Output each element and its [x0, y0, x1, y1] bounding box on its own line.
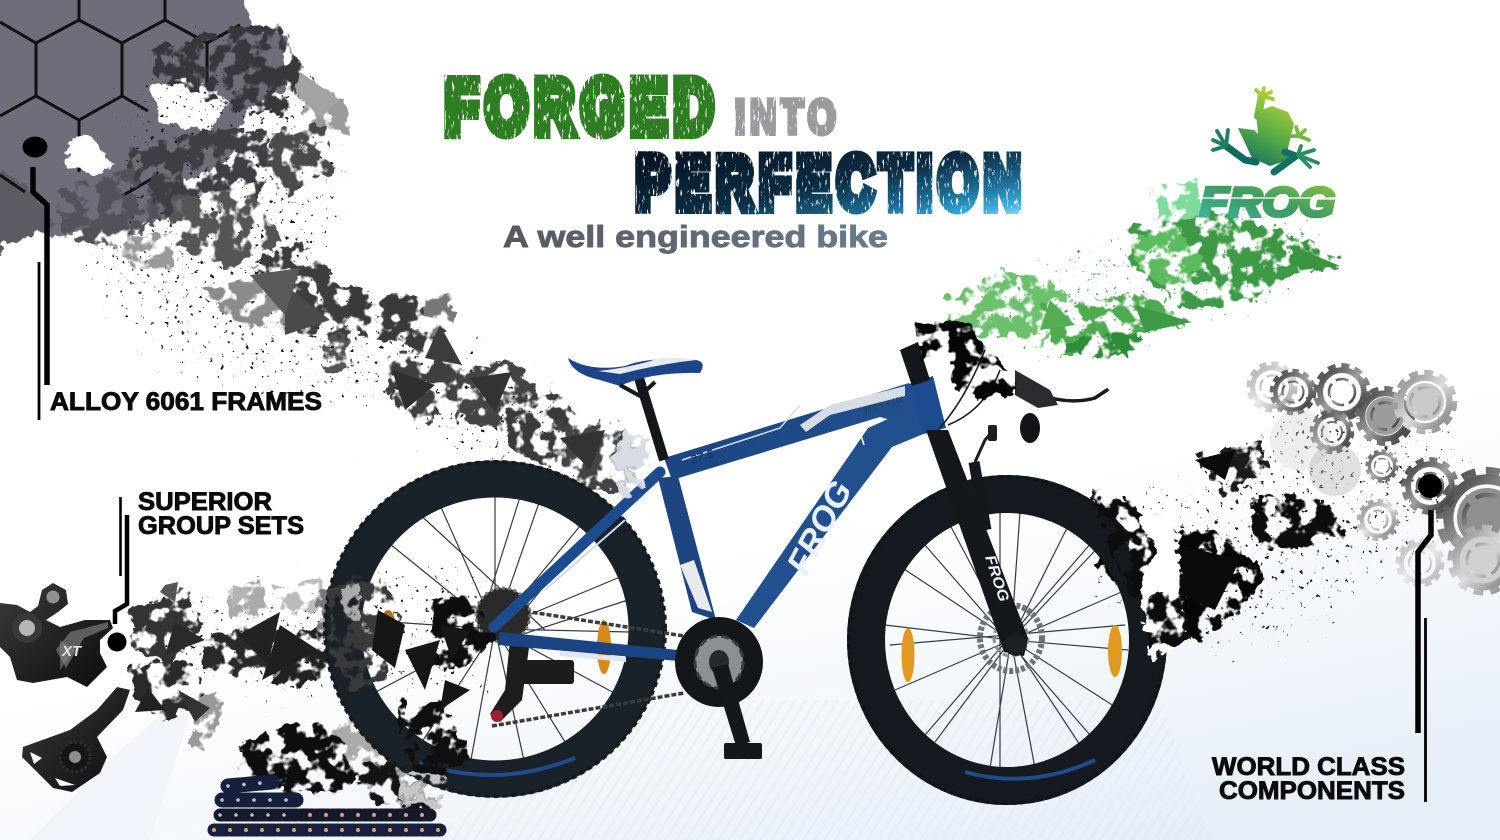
fork text: FROG — [981, 553, 1012, 604]
tagline: A well engineered bike — [503, 219, 888, 254]
derailleur badge: XT — [61, 643, 83, 660]
rear cassette and derailleur — [476, 588, 574, 722]
reflector — [597, 620, 611, 674]
front wheel — [849, 477, 1165, 803]
crisp green shards — [1040, 245, 1340, 332]
callout: world class components — [1212, 474, 1442, 805]
title: into: INTO — [735, 90, 841, 143]
title: perfection: PERFECTION — [636, 143, 1027, 224]
reflector — [1108, 625, 1122, 677]
fork and head — [926, 350, 1028, 656]
shatter over front wheel — [1090, 490, 1190, 660]
green shard trail — [945, 180, 1342, 358]
brake disc — [980, 605, 1042, 671]
callout: alloy frames — [22, 136, 322, 420]
crisp shards at hub — [372, 610, 470, 710]
label: SUPERIOR — [138, 488, 272, 516]
label: GROUP SETS — [138, 512, 304, 540]
title — [445, 64, 1027, 254]
handlebar and stem — [900, 320, 1107, 443]
logo wordmark: FROG — [1200, 179, 1335, 225]
reflector — [379, 610, 397, 662]
frame text: model: VIPER X-101 — [862, 394, 905, 416]
chain links — [214, 782, 440, 830]
derailleur body — [0, 583, 113, 687]
frame text: FROG: FROG — [780, 475, 860, 581]
frame text: size: 27.5 — [688, 447, 716, 467]
rear wheel — [325, 462, 665, 796]
shard trail: alloy frames — [60, 25, 645, 495]
seat post and saddle — [568, 358, 703, 460]
title: forged: FORGED — [445, 64, 720, 149]
callout: group sets — [108, 488, 304, 652]
chain — [492, 608, 684, 726]
right shard trail — [1090, 440, 1345, 640]
bicycle — [325, 320, 1165, 803]
label: WORLD CLASS — [1212, 753, 1405, 781]
shard trail: chain — [240, 700, 440, 815]
rear derailleur — [0, 583, 130, 792]
white breakup on plate — [0, 76, 226, 290]
chainring and crank — [675, 617, 763, 759]
reflector — [902, 628, 914, 682]
derailleur cage — [22, 687, 130, 792]
gears — [1249, 364, 1500, 592]
shatter over rear wheel — [328, 430, 650, 810]
hexagon grid lines — [0, 0, 240, 196]
frog logo — [1197, 88, 1336, 225]
crisp shards: group sets — [135, 582, 318, 722]
label: ALLOY 6061 FRAMES — [50, 388, 322, 416]
label: COMPONENTS — [1219, 777, 1405, 805]
frame — [494, 376, 946, 662]
shard trail: group sets — [130, 578, 385, 760]
crisp black shards — [1135, 450, 1240, 610]
hexagon alloy plate — [0, 0, 285, 290]
crisp shards: alloy frames — [250, 72, 605, 470]
icon: frog — [1213, 88, 1318, 172]
